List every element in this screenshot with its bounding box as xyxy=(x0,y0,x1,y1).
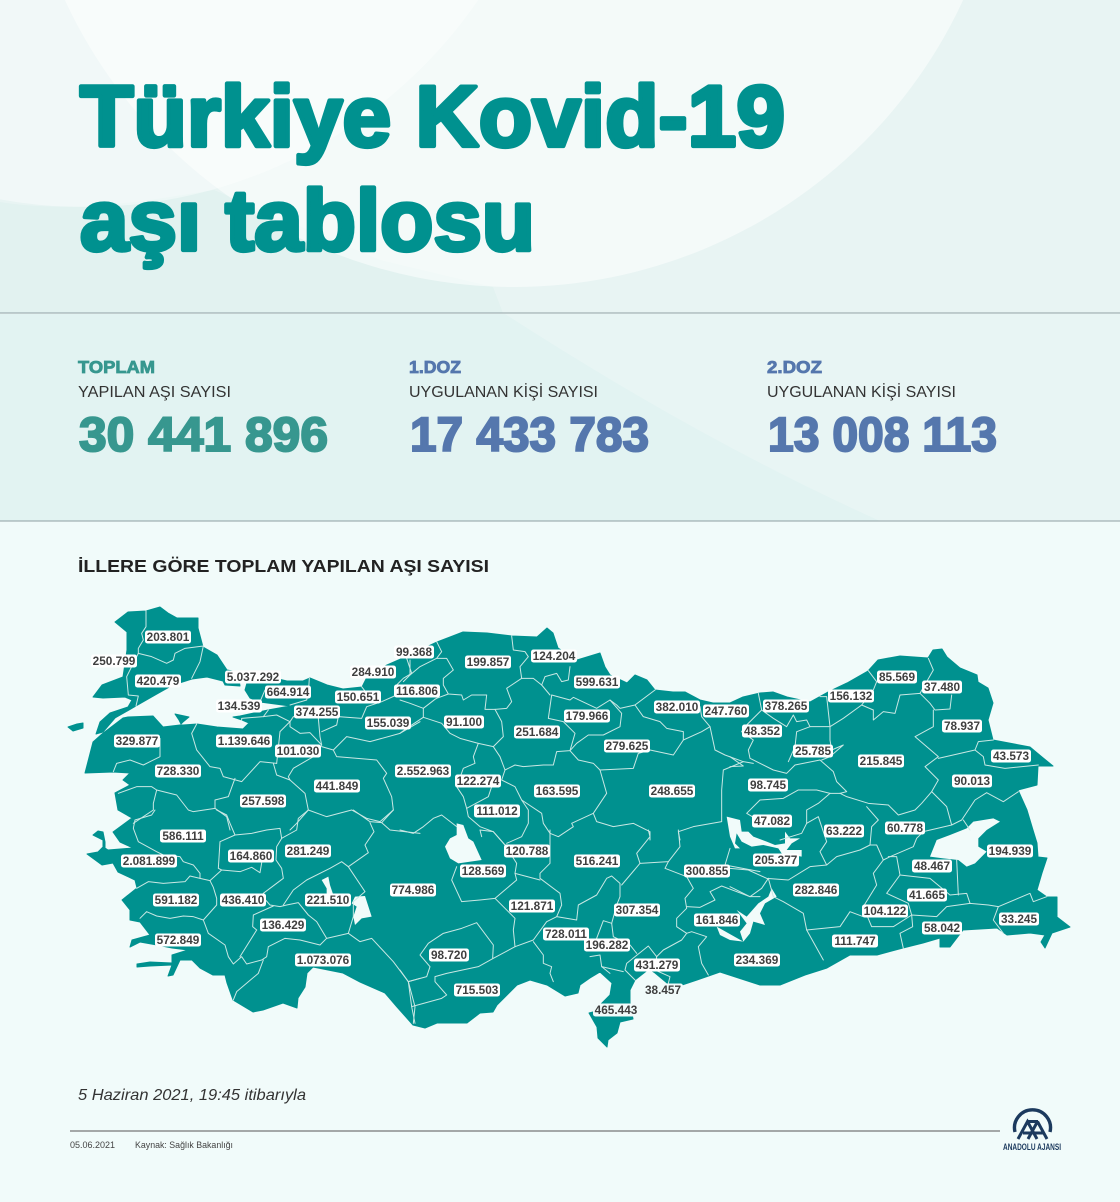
value 329.877: 329.877 xyxy=(116,734,159,748)
value 136.429: 136.429 xyxy=(262,918,305,932)
stat: toplam: YAPILAN AŞI SAYISI xyxy=(78,384,231,401)
value 164.860: 164.860 xyxy=(230,849,273,863)
value 98.745: 98.745 xyxy=(750,778,786,792)
value 85.569: 85.569 xyxy=(879,670,915,684)
value 728.330: 728.330 xyxy=(157,764,200,778)
stat: 1. doz: UYGULANAN KİŞİ SAYISI xyxy=(409,383,598,401)
value 774.986: 774.986 xyxy=(392,883,435,897)
title: aşı tablosu xyxy=(80,173,535,269)
value 60.778: 60.778 xyxy=(887,821,923,835)
value 134.539: 134.539 xyxy=(218,699,261,713)
value 199.857: 199.857 xyxy=(467,655,510,669)
province value labels xyxy=(91,630,1039,1017)
value 63.222: 63.222 xyxy=(826,824,862,838)
value 300.855: 300.855 xyxy=(686,864,729,878)
value 203.801: 203.801 xyxy=(147,630,190,644)
value 382.010: 382.010 xyxy=(656,700,699,714)
map heading: İLLERE GÖRE TOPLAM YAPILAN AŞI SAYISI xyxy=(78,556,489,576)
value 234.369: 234.369 xyxy=(736,953,779,967)
stat: toplam: 30 441 896 xyxy=(79,409,328,462)
value 33.245: 33.245 xyxy=(1001,912,1037,926)
value 98.720: 98.720 xyxy=(431,948,467,962)
title: Türkiye Kovid-19 xyxy=(80,69,785,165)
value 99.368: 99.368 xyxy=(396,645,432,659)
value 420.479: 420.479 xyxy=(137,674,180,688)
value 163.595: 163.595 xyxy=(536,784,579,798)
value 715.503: 715.503 xyxy=(456,983,499,997)
value 78.937: 78.937 xyxy=(944,719,980,733)
value 572.849: 572.849 xyxy=(157,933,200,947)
stat: toplam: TOPLAM xyxy=(78,357,155,377)
stat: 2. doz: 13 008 113 xyxy=(768,409,997,462)
value 591.182: 591.182 xyxy=(155,893,198,907)
value 156.132: 156.132 xyxy=(830,689,873,703)
value 155.039: 155.039 xyxy=(367,716,410,730)
stat: 2. doz xyxy=(767,357,997,462)
value 251.684: 251.684 xyxy=(516,725,559,739)
value 41.665: 41.665 xyxy=(909,888,945,902)
value 150.651: 150.651 xyxy=(337,690,380,704)
stat: 1. doz: 1.DOZ xyxy=(409,357,461,377)
logo: Anadolu Ajansı: ANADOLU AJANSI xyxy=(1003,1142,1061,1152)
footer rule xyxy=(70,1130,1000,1132)
value 247.760: 247.760 xyxy=(705,704,748,718)
value 91.100: 91.100 xyxy=(446,715,482,729)
value 215.845: 215.845 xyxy=(860,754,903,768)
value 128.569: 128.569 xyxy=(462,864,505,878)
stat: 1. doz: 17 433 783 xyxy=(410,409,649,462)
value 58.042: 58.042 xyxy=(924,921,960,935)
value 37.480: 37.480 xyxy=(924,680,960,694)
value 161.846: 161.846 xyxy=(696,913,739,927)
value 221.510: 221.510 xyxy=(307,893,350,907)
logo: Anadolu Ajansı xyxy=(1003,1110,1061,1152)
value 2.552.963: 2.552.963 xyxy=(397,764,450,778)
value 111.012: 111.012 xyxy=(476,804,518,818)
date note: 5 Haziran 2021, 19:45 itibarıyla xyxy=(78,1087,306,1104)
value 90.013: 90.013 xyxy=(954,774,990,788)
value 1.073.076: 1.073.076 xyxy=(297,953,350,967)
divider lines xyxy=(0,313,1120,521)
value 196.282: 196.282 xyxy=(586,938,629,952)
value 104.122: 104.122 xyxy=(864,904,907,918)
value 257.598: 257.598 xyxy=(242,794,285,808)
stat: toplam xyxy=(78,357,328,462)
value 120.788: 120.788 xyxy=(506,844,549,858)
footer source: Kaynak: Sağlık Bakanlığı xyxy=(135,1140,233,1150)
value 179.966: 179.966 xyxy=(566,709,609,723)
province borders xyxy=(113,611,1047,1023)
stat: 2. doz: UYGULANAN KİŞİ SAYISI xyxy=(767,383,956,401)
value 250.799: 250.799 xyxy=(93,654,136,668)
stats band background xyxy=(0,314,1120,521)
value 116.806: 116.806 xyxy=(396,684,438,698)
value 516.241: 516.241 xyxy=(576,854,619,868)
value 248.655: 248.655 xyxy=(651,784,694,798)
value 378.265: 378.265 xyxy=(765,699,808,713)
value 25.785: 25.785 xyxy=(795,744,831,758)
value 374.255: 374.255 xyxy=(296,705,339,719)
stat: 2. doz: 2.DOZ xyxy=(767,357,822,377)
value 121.871: 121.871 xyxy=(511,899,554,913)
value 124.204: 124.204 xyxy=(533,649,576,663)
value 47.082: 47.082 xyxy=(754,814,790,828)
value 43.573: 43.573 xyxy=(993,749,1029,763)
value 122.274: 122.274 xyxy=(457,774,500,788)
value 48.467: 48.467 xyxy=(914,859,950,873)
value 5.037.292: 5.037.292 xyxy=(227,670,280,684)
title xyxy=(80,69,785,269)
value 728.011: 728.011 xyxy=(545,927,587,941)
value 279.625: 279.625 xyxy=(606,739,649,753)
value 1.139.646: 1.139.646 xyxy=(218,734,271,748)
value 281.249: 281.249 xyxy=(287,844,330,858)
value 599.631: 599.631 xyxy=(576,675,619,689)
value 282.846: 282.846 xyxy=(795,883,838,897)
stat: 1. doz xyxy=(409,357,649,462)
value 431.279: 431.279 xyxy=(636,958,679,972)
value 205.377: 205.377 xyxy=(755,853,798,867)
value 48.352: 48.352 xyxy=(744,724,780,738)
lakes xyxy=(322,817,1000,942)
value 664.914: 664.914 xyxy=(267,685,310,699)
value 284.910: 284.910 xyxy=(352,665,395,679)
footer date: 05.06.2021 xyxy=(70,1140,115,1150)
header background with circles xyxy=(0,0,1120,313)
value 2.081.899: 2.081.899 xyxy=(123,854,176,868)
value 194.939: 194.939 xyxy=(989,844,1032,858)
value 111.747: 111.747 xyxy=(834,934,876,948)
value 441.849: 441.849 xyxy=(316,779,359,793)
value 307.354: 307.354 xyxy=(616,903,659,917)
map of Turkey xyxy=(68,607,1070,1047)
value 465.443: 465.443 xyxy=(595,1003,638,1017)
value 436.410: 436.410 xyxy=(222,893,265,907)
value 101.030: 101.030 xyxy=(277,744,320,758)
landmass xyxy=(68,607,1070,1047)
value 586.111: 586.111 xyxy=(162,829,204,843)
value 38.457: 38.457 xyxy=(645,983,681,997)
